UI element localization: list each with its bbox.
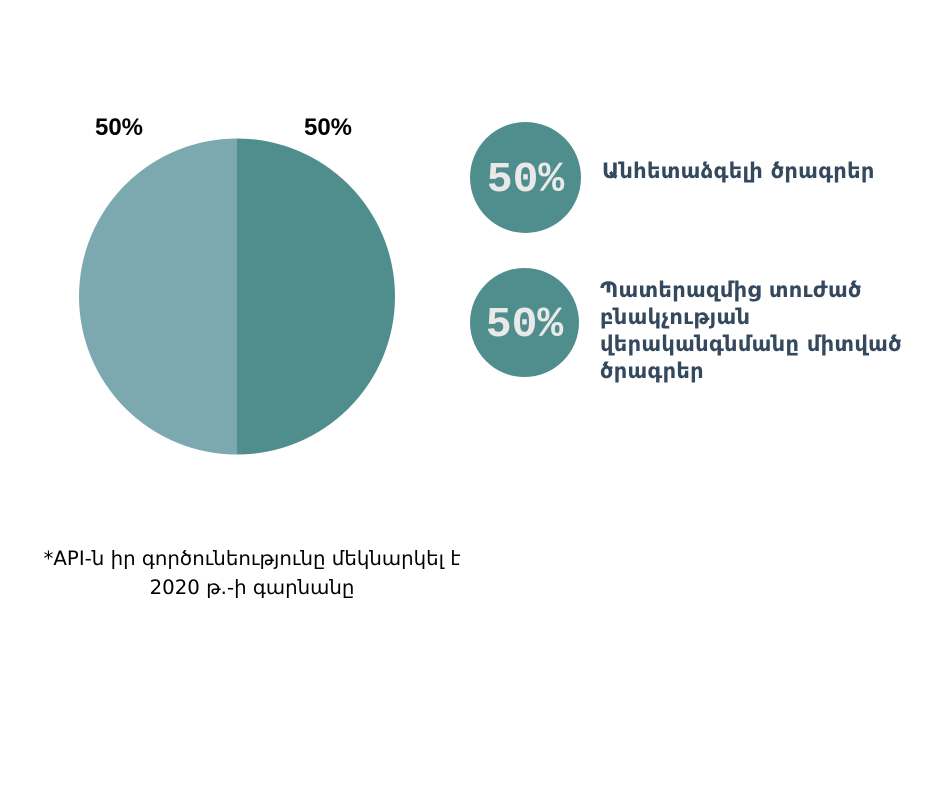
stat value 1: 50%	[487, 155, 564, 204]
pie label: right 50%: 50%	[304, 114, 352, 141]
description 2	[600, 278, 902, 383]
description 1: Անհետաձգելի ծրագրեր	[602, 159, 875, 183]
stat circle 2	[470, 268, 579, 377]
pie label: left 50%: 50%	[95, 114, 143, 141]
footnote: 2020 թ.-ի գարնանը	[150, 576, 354, 599]
slice: right 50%	[237, 138, 395, 454]
description 2: ծրագրեր	[600, 359, 704, 383]
description 2: Պատերազմից տուժած	[600, 278, 862, 302]
description 2: բնակչության	[600, 305, 750, 329]
pie chart	[79, 138, 395, 454]
footnote	[44, 547, 460, 599]
stat value 2: 50%	[486, 300, 563, 349]
slice: left 50%	[79, 138, 237, 454]
description 2: վերականգնմանը միտված	[600, 332, 902, 356]
footnote: *API-ն իր գործունեությունը մեկնարկել է	[44, 547, 460, 570]
stat circle 1	[470, 122, 581, 233]
